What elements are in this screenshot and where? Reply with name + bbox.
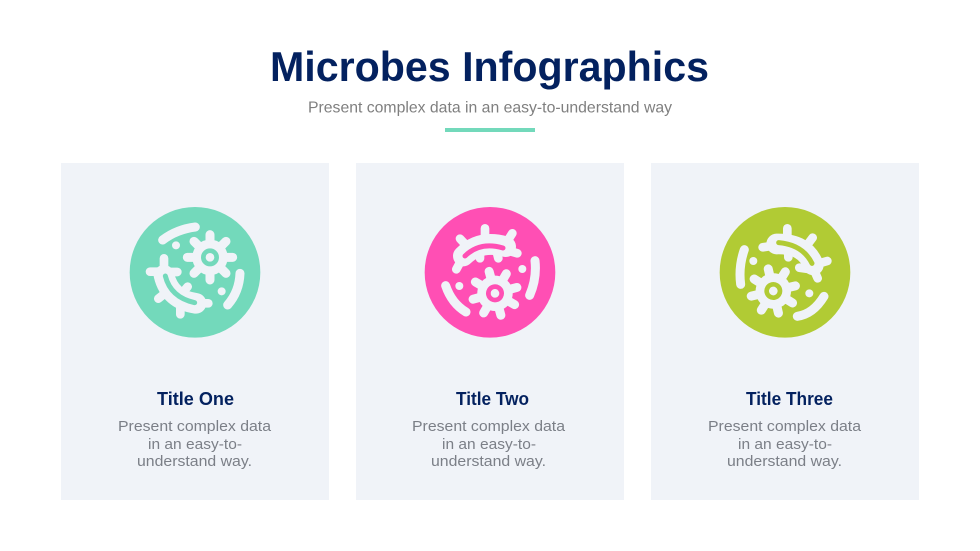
card background one — [61, 163, 329, 500]
accent divider — [445, 128, 535, 132]
icon: pink microbes — [425, 207, 555, 338]
card text two — [412, 418, 566, 470]
panel: title one — [61, 163, 329, 500]
card heading three: Title Three — [746, 389, 833, 409]
card text one: in an easy-to- — [148, 436, 242, 453]
icon: green microbes — [130, 207, 260, 338]
card text two: understand way. — [431, 453, 546, 470]
card text three: in an easy-to- — [738, 436, 832, 453]
card text one: understand way. — [137, 453, 252, 470]
card text two: Present complex data — [412, 418, 566, 435]
title: Microbes Infographics — [270, 43, 709, 90]
card background three — [651, 163, 919, 500]
card text two: in an easy-to- — [442, 436, 536, 453]
card text three: Present complex data — [708, 418, 862, 435]
card text one — [118, 418, 272, 470]
icon: lime microbes — [720, 207, 850, 338]
card heading one: Title One — [157, 389, 234, 409]
card text one: Present complex data — [118, 418, 272, 435]
card text three — [708, 418, 862, 470]
card background two — [356, 163, 624, 500]
card heading two: Title Two — [456, 389, 529, 409]
panel: title three — [651, 163, 919, 500]
subtitle: Present complex data in an easy-to-understand way — [308, 100, 672, 116]
card text three: understand way. — [727, 453, 842, 470]
panel: title two — [356, 163, 624, 500]
